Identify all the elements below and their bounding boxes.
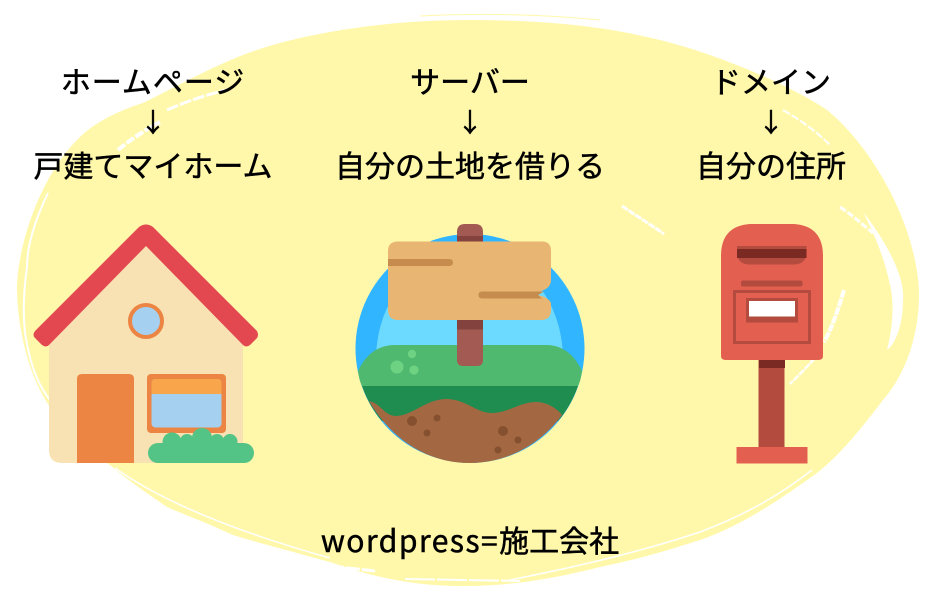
- soil: [369, 399, 562, 463]
- post: [457, 224, 483, 366]
- column 3 heading: domain: ドメイン: [711, 58, 831, 102]
- house roof: [34, 224, 258, 346]
- soil stones: [407, 414, 522, 454]
- icon: house: [34, 224, 258, 463]
- door panel: [734, 292, 810, 342]
- icon: signpost on land: [356, 224, 584, 463]
- arrow 1: ↓: [140, 103, 166, 140]
- arrow 3: ↓: [758, 103, 784, 140]
- inner sky: [376, 252, 563, 390]
- house wall: [49, 240, 243, 463]
- box body: [721, 224, 823, 360]
- board grain: [388, 259, 453, 266]
- grass hill: [358, 345, 582, 386]
- icon: post box: [721, 224, 823, 464]
- round attic window: [130, 305, 162, 337]
- pillar: [758, 360, 784, 448]
- arrow 2: ↓: [457, 103, 483, 140]
- column 3 text: own address: 自分の住所: [696, 142, 846, 186]
- door: [77, 374, 134, 463]
- column 2 text: renting land: 自分の土地を借りる: [335, 142, 605, 186]
- column 1 text: detached house: 戸建てマイホーム: [33, 142, 273, 186]
- grass dots: [390, 350, 419, 375]
- column 2 heading: server: サーバー: [410, 58, 530, 102]
- collection plate: [746, 298, 798, 322]
- dark grass: [362, 386, 578, 421]
- label bar: [741, 280, 802, 286]
- mail slot: [737, 246, 806, 264]
- wooden board: [388, 242, 551, 320]
- bush: [148, 428, 254, 463]
- sky circle: [356, 234, 584, 463]
- front window: [147, 374, 226, 433]
- caption: wordpress: wordpress=施工会社: [321, 517, 619, 561]
- base: [736, 447, 808, 464]
- column 1 heading: homepage: ホームページ: [61, 58, 245, 102]
